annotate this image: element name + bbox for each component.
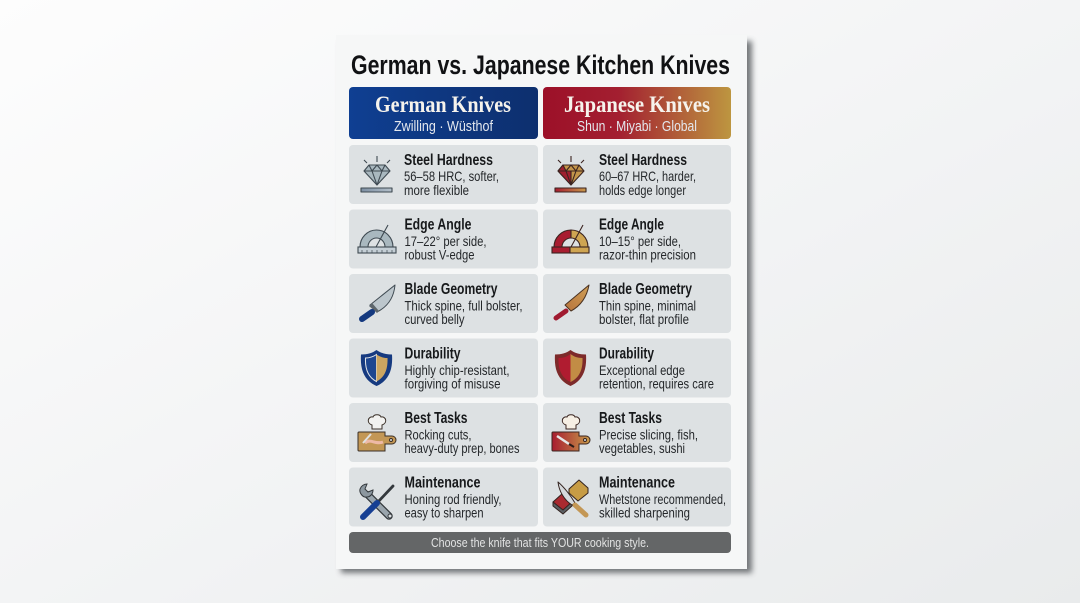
panel: German blade geometry: Thick spine, full bolster,: [404, 298, 522, 314]
panel: German edge angle: 17–22° per side,: [404, 234, 486, 249]
panel: German edge angle: Edge Angle: [404, 216, 472, 234]
panel: German best tasks: [349, 403, 538, 462]
icon: Japanese chef knife: [556, 285, 589, 318]
panel: German blade geometry: curved belly: [404, 312, 465, 327]
panel: German maintenance: [349, 468, 538, 526]
panel: Japanese maintenance: Whetstone recommended,: [599, 492, 726, 507]
panel: Japanese edge angle: razor-thin precision: [599, 248, 696, 262]
panel: Japanese maintenance: Maintenance: [599, 474, 675, 492]
panel: Japanese steel hardness: Steel Hardness: [599, 152, 687, 169]
panel: Japanese blade geometry: Blade Geometry: [599, 281, 692, 298]
panel: German edge angle: [349, 210, 538, 268]
icon: chef hat and cutting board with meat: [358, 415, 396, 451]
title: German vs. Japanese Kitchen Knives: [351, 50, 730, 80]
card: [336, 35, 747, 569]
panel: Japanese edge angle: Edge Angle: [599, 216, 664, 234]
panel: German steel hardness: Steel Hardness: [404, 152, 493, 169]
icon: German chef knife: [362, 285, 395, 319]
icon: protractor red and gold: [552, 225, 589, 253]
icon: chef hat and cutting board with knife: [552, 415, 590, 451]
icon: diamond gold: [555, 156, 586, 192]
header: Japanese Knives: Japanese Knives: [564, 92, 710, 118]
panel: Japanese blade geometry: [543, 274, 731, 333]
footer banner: [349, 532, 731, 553]
panel: Japanese blade geometry: bolster, flat profile: [599, 312, 689, 327]
panel: Japanese maintenance: skilled sharpening: [599, 506, 690, 520]
panel: German steel hardness: [349, 145, 538, 204]
panel: German maintenance: Maintenance: [404, 474, 481, 492]
panel: German durability: Highly chip-resistant,: [404, 363, 510, 378]
icon: red and gold shield: [555, 350, 586, 386]
header: German Knives: [349, 87, 538, 139]
panel: Japanese durability: Exceptional edge: [599, 363, 685, 378]
panel: Japanese steel hardness: 60–67 HRC, harder,: [599, 169, 696, 184]
panel: Japanese maintenance: [543, 468, 731, 526]
icon: wrench and screwdriver: [360, 484, 393, 518]
panel: Japanese best tasks: vegetables, sushi: [599, 441, 685, 456]
panel: German durability: forgiving of misuse: [404, 376, 500, 392]
panel: Japanese edge angle: [543, 210, 731, 268]
panel: German edge angle: robust V-edge: [404, 248, 474, 262]
panel: German maintenance: Honing rod friendly,: [404, 492, 502, 507]
header: Japanese Knives: Shun · Miyabi · Global: [577, 119, 697, 135]
panel: German durability: Durability: [404, 346, 461, 362]
panel: German best tasks: heavy-duty prep, bones: [404, 441, 520, 456]
panel: Japanese steel hardness: holds edge longer: [599, 183, 686, 198]
icon: diamond steel: [361, 156, 392, 192]
icon: blue and gold shield: [361, 350, 392, 386]
footer banner: Choose the knife that fits YOUR cooking style.: [431, 536, 649, 550]
panel: German best tasks: Best Tasks: [404, 410, 468, 427]
panel: German durability: [349, 338, 538, 398]
header: German Knives: German Knives: [375, 92, 511, 118]
panel: Japanese steel hardness: [543, 145, 731, 204]
panel: German blade geometry: [349, 274, 538, 333]
panel: German maintenance: easy to sharpen: [404, 506, 484, 520]
icon: whetstone and knife: [553, 480, 588, 515]
panel: German steel hardness: more flexible: [404, 183, 469, 198]
panel: German best tasks: Rocking cuts,: [404, 428, 472, 442]
panel: Japanese edge angle: 10–15° per side,: [599, 234, 681, 249]
panel: Japanese durability: Durability: [599, 346, 654, 362]
header: Japanese Knives: [543, 87, 731, 139]
panel: Japanese best tasks: Precise slicing, fish,: [599, 428, 698, 442]
panel: German steel hardness: 56–58 HRC, softer,: [404, 169, 499, 184]
panel: Japanese durability: retention, requires care: [599, 376, 714, 392]
icon: protractor steel: [358, 225, 396, 253]
header: German Knives: Zwilling · Wüsthof: [394, 119, 494, 135]
panel: Japanese best tasks: Best Tasks: [599, 410, 662, 427]
card shadow: [341, 41, 752, 573]
panel: Japanese durability: [543, 338, 731, 398]
panel: Japanese blade geometry: Thin spine, minimal: [599, 298, 696, 314]
panel: Japanese best tasks: [543, 403, 731, 462]
panel: German blade geometry: Blade Geometry: [404, 281, 498, 298]
